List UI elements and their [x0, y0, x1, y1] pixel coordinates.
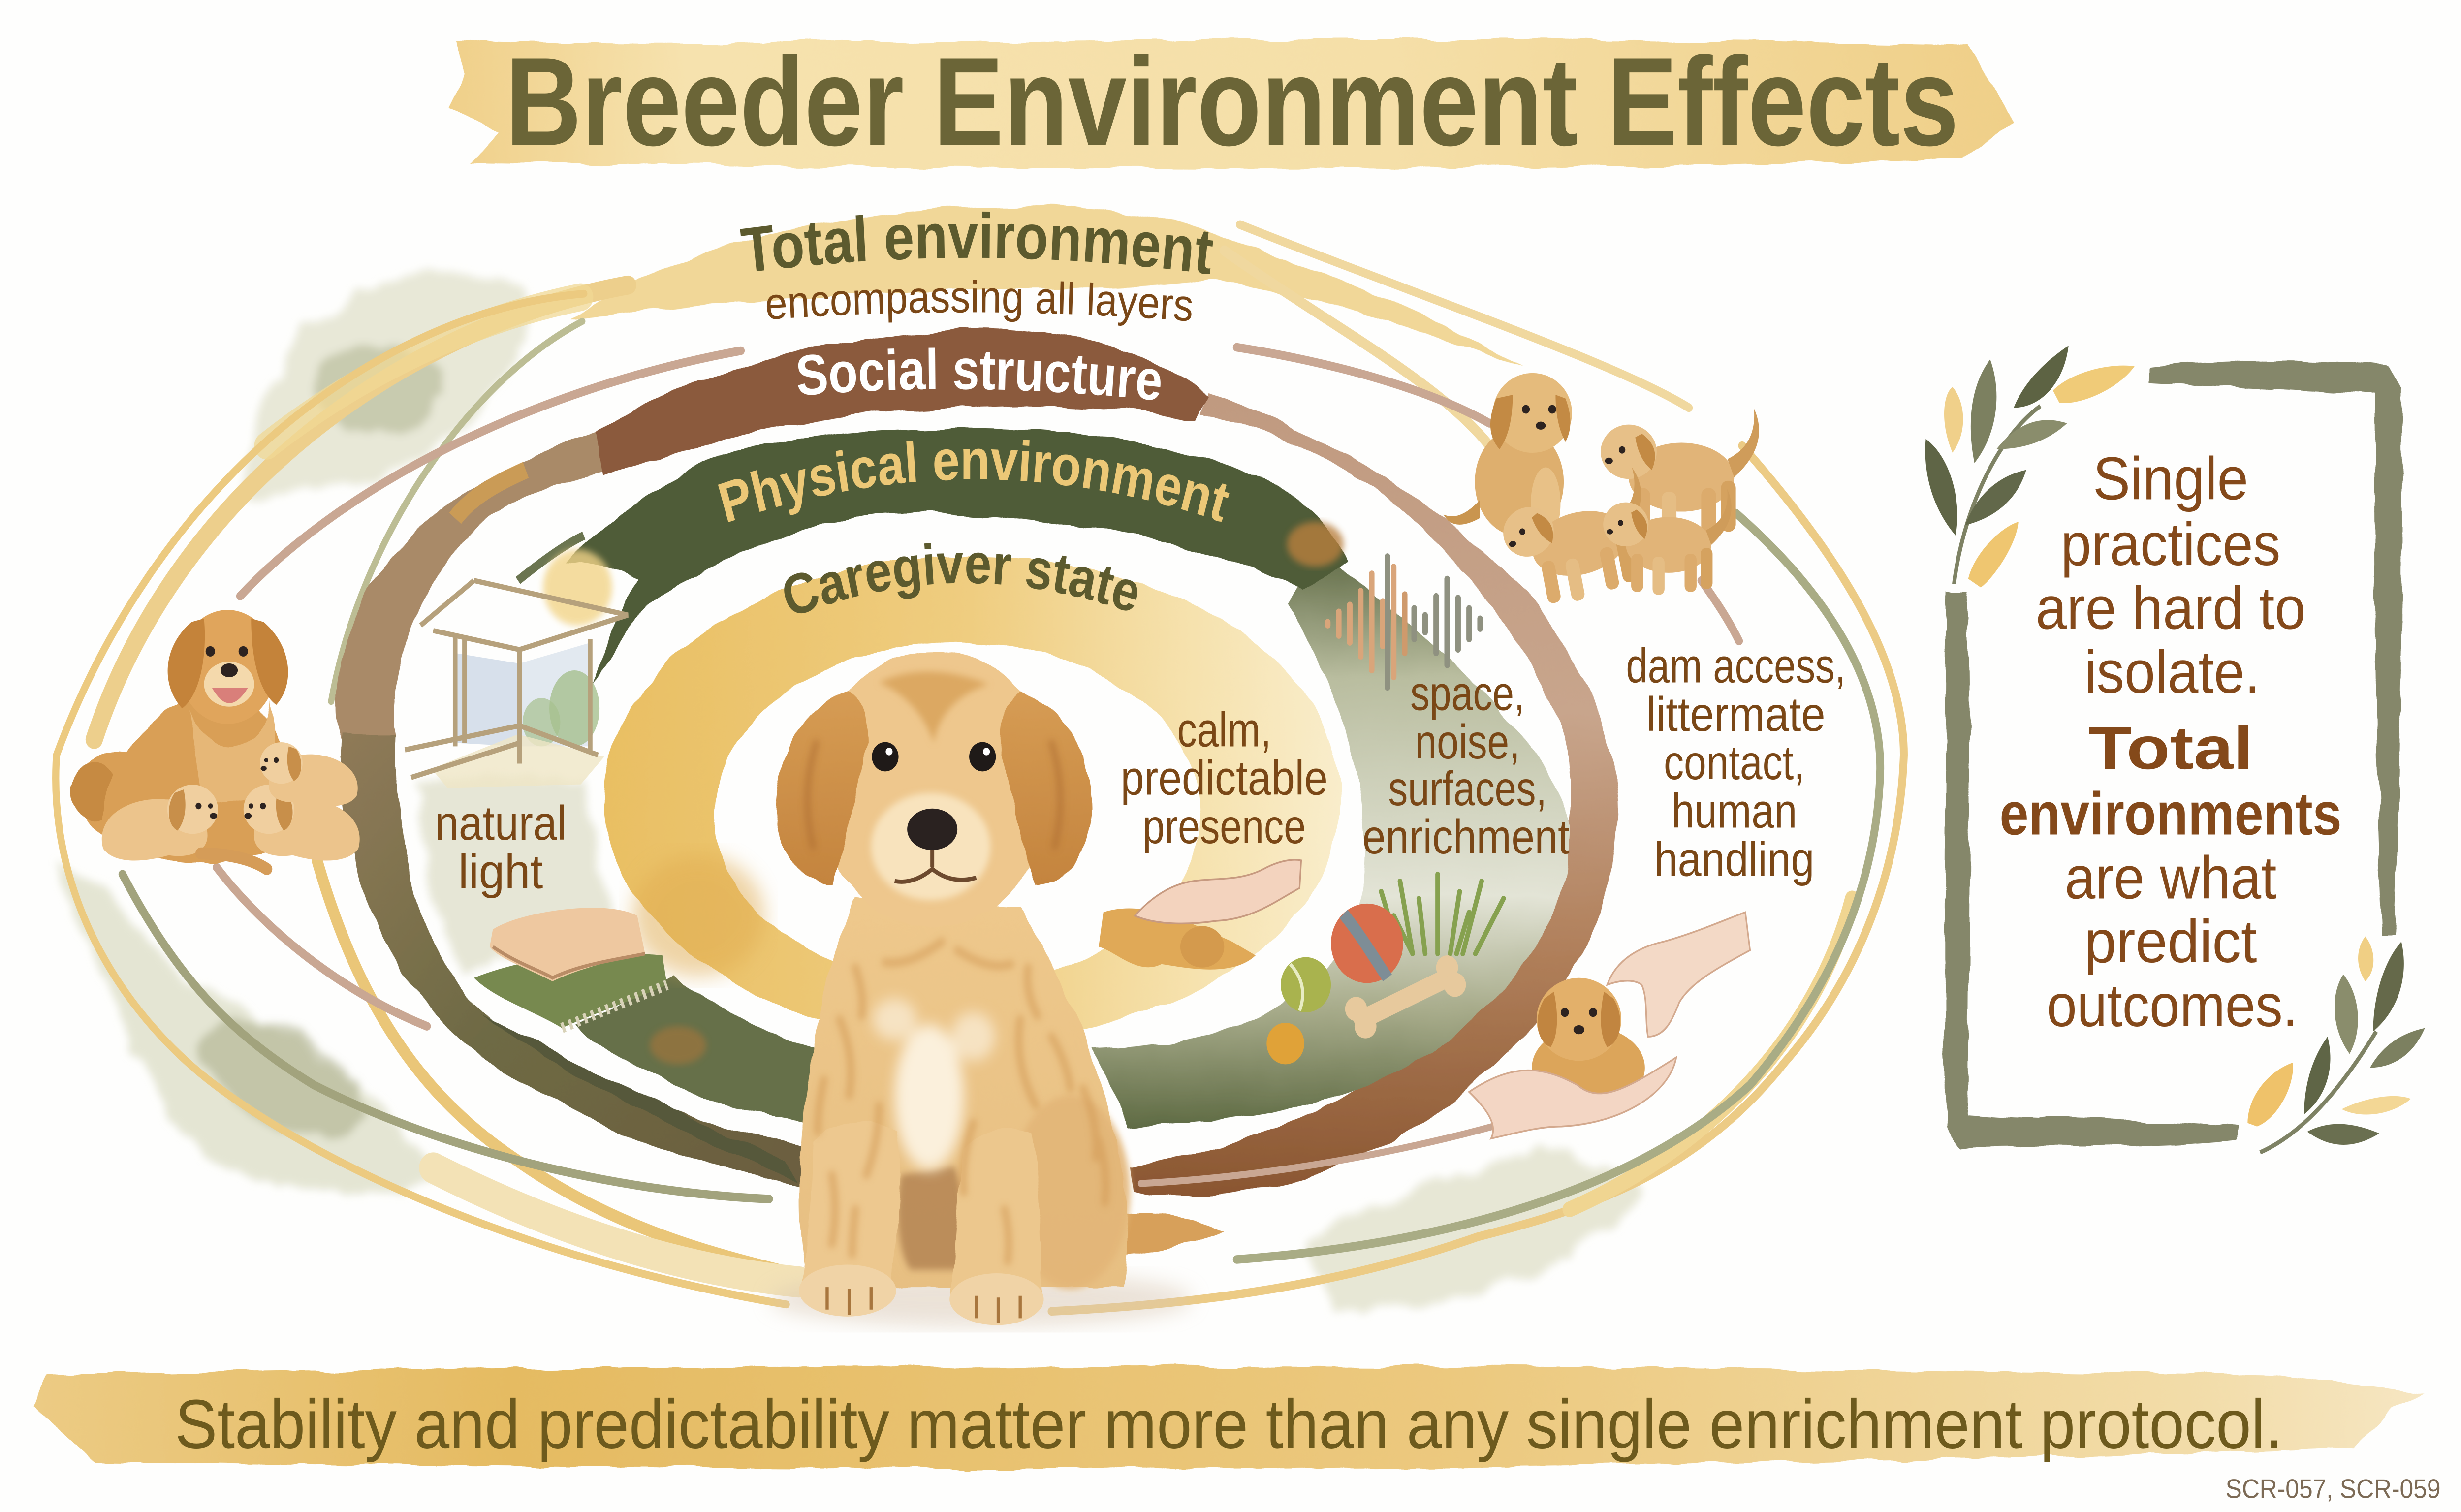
label: social structure: Social structure: [798, 347, 1161, 400]
icon: leaf sprig top left: [1925, 346, 2135, 587]
panel: nested environment rings: [52, 204, 1908, 1325]
text: space, noise, surfaces, enrichment: [1362, 666, 1570, 864]
watercolour washes: [55, 271, 1644, 1310]
text: calm, predictable presence: predictable: [1121, 751, 1328, 805]
frame: [1945, 361, 2402, 1147]
label: physical environment: Physical environment: [718, 440, 1230, 523]
icon: grass tuft: [1381, 874, 1504, 954]
ring: total environment: [52, 204, 1908, 1319]
callout text: practices: [2061, 510, 2280, 578]
belly shadow: [898, 1166, 966, 1270]
icon: toys: [1266, 904, 1466, 1064]
shadow: [769, 1272, 1193, 1327]
ring: caregiver state: [604, 532, 1342, 1040]
text: calm, predictable presence: calm,: [1177, 702, 1271, 756]
callout text: predict: [2084, 908, 2257, 975]
paws: [799, 1265, 896, 1317]
muzzle: [871, 793, 990, 900]
icon: puppies playing: [1444, 373, 1759, 615]
callout text: Total: [2088, 714, 2253, 782]
icon: central golden retriever puppy: [769, 651, 1224, 1327]
text: dam access, littermate contact, human handling: human: [1672, 784, 1797, 838]
text: calm, predictable presence: [1121, 702, 1328, 853]
text: dam access, littermate contact, human handling: littermate: [1646, 687, 1826, 741]
icon: leaf sprig bottom right: [2247, 937, 2425, 1152]
nose and mouth: [907, 809, 957, 850]
head fluff: [816, 651, 1052, 928]
ears: [775, 691, 868, 884]
icon: hands holding puppy: [1469, 912, 1750, 1138]
callout text: [2000, 445, 2342, 1039]
callout text: are hard to: [2036, 574, 2305, 642]
text: space, noise, surfaces, enrichment: noise,: [1415, 715, 1520, 769]
callout text: Single: [2093, 445, 2248, 512]
body: [800, 898, 1128, 1287]
text: dam access, littermate contact, human handling: [1626, 639, 1846, 886]
text: natural light: natural: [435, 796, 567, 850]
panel: callout single practices: [1925, 346, 2425, 1152]
text: space, noise, surfaces, enrichment: space,: [1410, 666, 1525, 721]
label: encompassing all layers: encompassing all layers: [767, 280, 1192, 326]
eyes: [872, 742, 899, 771]
front legs: [802, 1121, 900, 1292]
text: space, noise, surfaces, enrichment: enrichment: [1362, 810, 1570, 864]
text: dam access, littermate contact, human handling: dam access,: [1626, 639, 1846, 693]
bottom band: [32, 1366, 2425, 1468]
haunch: [1011, 1096, 1130, 1289]
icon: hand petting small dog: [1099, 860, 1301, 970]
ring: physical environment: [479, 428, 1571, 1184]
ring: social structure: [213, 327, 1743, 1197]
title: Breeder Environment Effects: [505, 31, 1959, 172]
callout text: outcomes.: [2047, 972, 2298, 1039]
callout text: are what: [2065, 844, 2276, 912]
text: dam access, littermate contact, human handling: handling: [1654, 832, 1814, 886]
text: dam access, littermate contact, human handling: contact,: [1664, 735, 1805, 789]
text: natural light: [435, 796, 567, 898]
fur marks: [818, 942, 1105, 1261]
title band: [450, 31, 2017, 172]
callout text: environments: [2000, 780, 2342, 848]
callout text: isolate.: [2084, 638, 2260, 706]
source references: SCR-057, SCR-059: [2226, 1474, 2441, 1504]
chest: [873, 999, 995, 1169]
text: natural light: light: [458, 844, 543, 898]
icon: window with natural light: [405, 549, 628, 968]
icon: sound wave: [1328, 556, 1480, 688]
tail: [1114, 1213, 1224, 1254]
text: space, noise, surfaces, enrichment: surfaces,: [1388, 761, 1547, 816]
text: calm, predictable presence: presence: [1142, 799, 1306, 853]
icon: blanket and mat: [474, 908, 667, 1028]
icon: dam with puppies: [69, 610, 360, 869]
label: caregiver state: Caregiver state: [784, 543, 1137, 613]
label: total environment: Total environment: [740, 212, 1213, 274]
takeaway text: Stability and predictability matter more than any single enrichment protocol.: [175, 1386, 2283, 1463]
